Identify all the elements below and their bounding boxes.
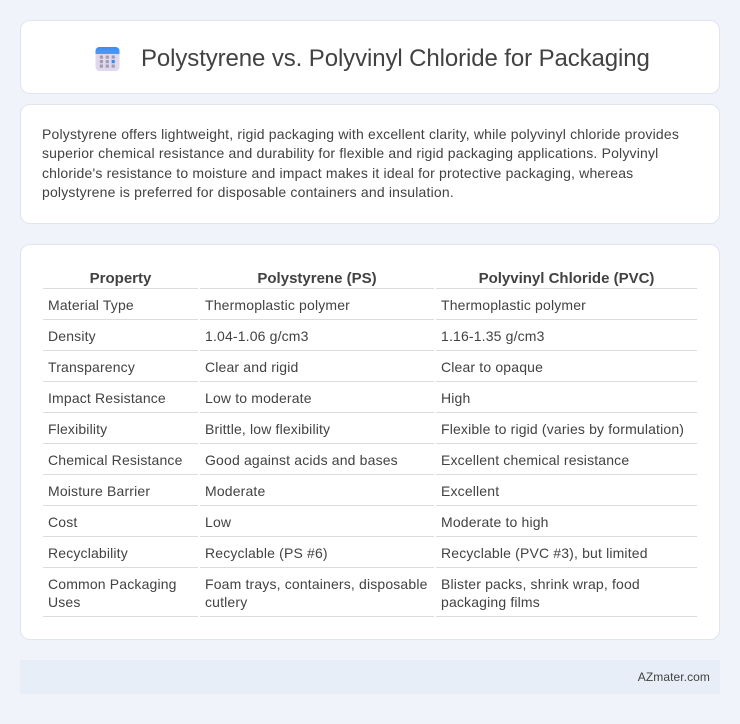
comparison table: Good against acids and bases bbox=[205, 452, 398, 468]
summary text: polystyrene is preferred for disposable containers and insulation. bbox=[42, 184, 454, 200]
header: polystyrene: Polystyrene (PS) bbox=[257, 270, 377, 287]
comparison table: Density bbox=[48, 328, 96, 344]
summary text: Polystyrene offers lightweight, rigid packaging with excellent clarity, while polyvinyl chloride provides bbox=[42, 126, 679, 142]
summary text: chloride's resistance to moisture and impact makes it ideal for protective packaging, whereas bbox=[42, 165, 633, 181]
row: material type: Material Type bbox=[48, 297, 134, 313]
comparison table: Recyclable (PVC #3), but limited bbox=[441, 545, 648, 561]
header: pvc: Polyvinyl Chloride (PVC) bbox=[479, 270, 654, 287]
comparison table: Blister packs, shrink wrap, food bbox=[441, 576, 640, 592]
comparison table: Thermoplastic polymer bbox=[205, 297, 350, 313]
comparison table: Excellent chemical resistance bbox=[441, 452, 629, 468]
comparison table: Impact Resistance bbox=[48, 390, 166, 406]
comparison table: 1.16-1.35 g/cm3 bbox=[441, 328, 545, 344]
comparison table: Flexibility bbox=[48, 421, 107, 437]
table panel bbox=[20, 244, 720, 640]
comparison table: Common Packaging bbox=[48, 576, 177, 592]
comparison table: Recyclability bbox=[48, 545, 128, 561]
comparison table: Moderate to high bbox=[441, 514, 549, 530]
footer source: AZmater.com bbox=[638, 670, 710, 684]
header: pvc bbox=[436, 268, 697, 289]
summary text: superior chemical resistance and durability for flexible and rigid packaging applications. Polyvinyl bbox=[42, 145, 658, 161]
comparison table: Moisture Barrier bbox=[48, 483, 150, 499]
comparison table: Transparency bbox=[48, 359, 135, 375]
comparison table: Moderate bbox=[205, 483, 265, 499]
comparison table: 1.04-1.06 g/cm3 bbox=[205, 328, 309, 344]
title: Polystyrene vs. Polyvinyl Chloride for Packaging bbox=[141, 45, 650, 72]
header: property: Property bbox=[90, 270, 151, 287]
comparison table: Flexible to rigid (varies by formulation) bbox=[441, 421, 684, 437]
comparison table: Clear and rigid bbox=[205, 359, 298, 375]
header: property bbox=[43, 268, 198, 289]
header: polystyrene bbox=[200, 268, 434, 289]
summary text bbox=[42, 126, 679, 200]
comparison table: Thermoplastic polymer bbox=[441, 297, 586, 313]
footer bar bbox=[20, 660, 720, 694]
comparison table: Chemical Resistance bbox=[48, 452, 183, 468]
comparison table: Recyclable (PS #6) bbox=[205, 545, 328, 561]
comparison table: High bbox=[441, 390, 470, 406]
comparison table: packaging films bbox=[441, 594, 540, 610]
comparison table: cutlery bbox=[205, 594, 247, 610]
summary panel bbox=[20, 104, 720, 224]
comparison table: Foam trays, containers, disposable bbox=[205, 576, 428, 592]
icon: calendar bbox=[96, 47, 120, 71]
comparison table: Low to moderate bbox=[205, 390, 312, 406]
title panel bbox=[20, 20, 720, 94]
comparison table: Clear to opaque bbox=[441, 359, 543, 375]
comparison table: Brittle, low flexibility bbox=[205, 421, 330, 437]
comparison table: Low bbox=[205, 514, 231, 530]
comparison table: Uses bbox=[48, 594, 81, 610]
comparison table: Cost bbox=[48, 514, 77, 530]
comparison table: Excellent bbox=[441, 483, 499, 499]
